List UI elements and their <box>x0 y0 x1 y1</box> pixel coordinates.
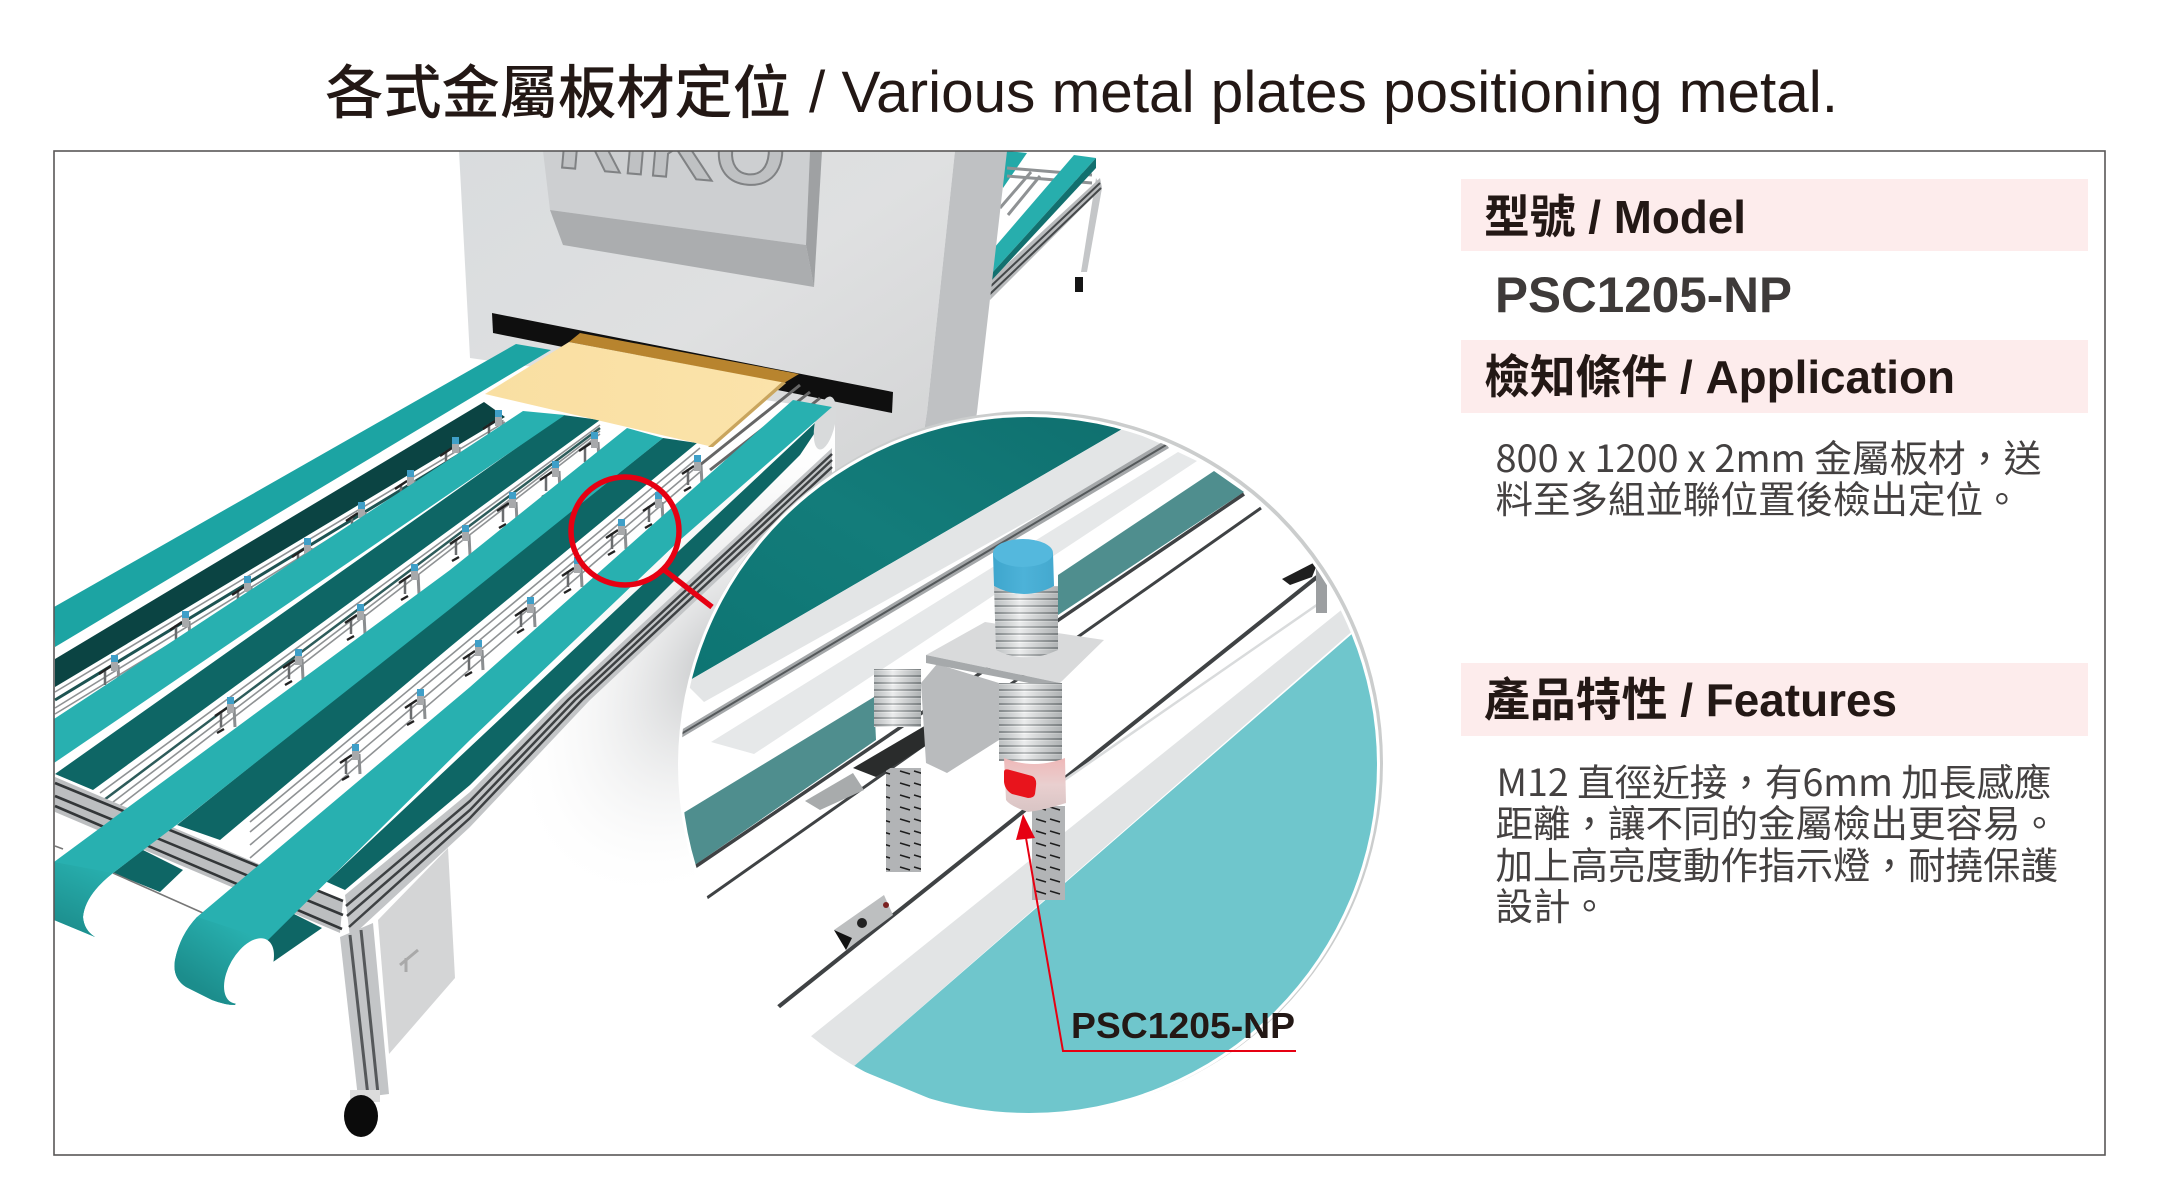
panel: model <box>1461 179 2088 323</box>
application heading: 檢知條件 / Application <box>1484 351 1955 403</box>
features text: 加上高亮度動作指示燈，耐撓保護 <box>1496 835 2058 890</box>
frame <box>54 151 2105 1155</box>
light teal belt <box>853 633 1389 1125</box>
features text: 距離，讓不同的金屬檢出更容易。 <box>1496 793 2058 848</box>
front cross bar <box>55 777 343 933</box>
detail lens <box>664 400 1389 1125</box>
panel: features <box>1461 663 2088 931</box>
features bar <box>1461 663 2088 736</box>
leg and back panel <box>340 848 455 1098</box>
lower belt runs <box>55 407 832 962</box>
sleeve <box>1004 758 1066 812</box>
light band <box>810 603 1356 1067</box>
proximity sensor <box>993 539 1066 900</box>
metal plate <box>485 333 799 447</box>
panel: application <box>1461 340 2088 524</box>
embossed logo plate: RIKO <box>554 85 790 207</box>
machine body <box>459 151 1007 490</box>
title <box>325 60 1838 126</box>
belt 1 <box>54 344 551 647</box>
black gap <box>55 402 505 687</box>
sensor row near <box>340 455 702 780</box>
belt 4 front wrap <box>174 917 268 1005</box>
right silver rail <box>345 448 832 938</box>
belt 4 <box>174 400 832 1005</box>
cap <box>993 553 1054 594</box>
roller end <box>224 938 274 1004</box>
rear sensor <box>805 669 935 872</box>
callout arrow <box>1016 814 1296 1051</box>
far conveyor <box>990 151 1102 300</box>
application text <box>1496 428 2042 524</box>
model value: PSC1205-NP <box>1495 267 1792 323</box>
black feed slot <box>492 313 893 413</box>
belt 3 <box>54 428 663 937</box>
caster <box>344 1090 380 1137</box>
title: / Various metal plates positioning metal. <box>809 60 1838 125</box>
application text: 料至多組並聯位置後檢出定位。 <box>1496 469 2020 524</box>
callout label: PSC1205-NP <box>1071 1005 1295 1046</box>
guide lines <box>692 494 1324 1008</box>
lower thread <box>999 683 1062 761</box>
dark belt <box>692 417 1122 680</box>
application text: 800 x 1200 x 2mm 金屬板材，送 <box>1496 428 2042 483</box>
bracket <box>921 622 1104 773</box>
embossed logo plate <box>543 152 822 287</box>
model bar <box>1461 179 2088 251</box>
features text: M12 直徑近接，有6mm 加長感應 <box>1496 752 2052 807</box>
floor shadow <box>588 508 766 812</box>
red magnifier ring <box>571 477 712 607</box>
sensor row middle <box>215 432 599 733</box>
features text <box>1496 752 2058 931</box>
features text: 設計。 <box>1496 876 1608 931</box>
sensor rails <box>55 385 820 858</box>
upper thread <box>994 586 1058 658</box>
belt 2 <box>54 411 565 763</box>
application bar <box>1461 340 2088 413</box>
model heading: 型號 / Model <box>1484 191 1746 243</box>
mid teal belt <box>680 471 1244 867</box>
title: 各式金屬板材定位 <box>325 61 791 126</box>
belt 3 front wrap <box>54 862 113 937</box>
lower clamp <box>834 895 893 950</box>
panel: conveyor illustration <box>54 85 1389 1137</box>
LED <box>1004 769 1036 798</box>
light rail bands <box>676 428 1197 754</box>
features heading: 產品特性 / Features <box>1484 674 1897 726</box>
front roller <box>54 845 203 914</box>
far clamp <box>1282 560 1327 613</box>
cable <box>1032 806 1065 900</box>
far roller <box>814 396 835 450</box>
sensor row far <box>99 410 503 691</box>
